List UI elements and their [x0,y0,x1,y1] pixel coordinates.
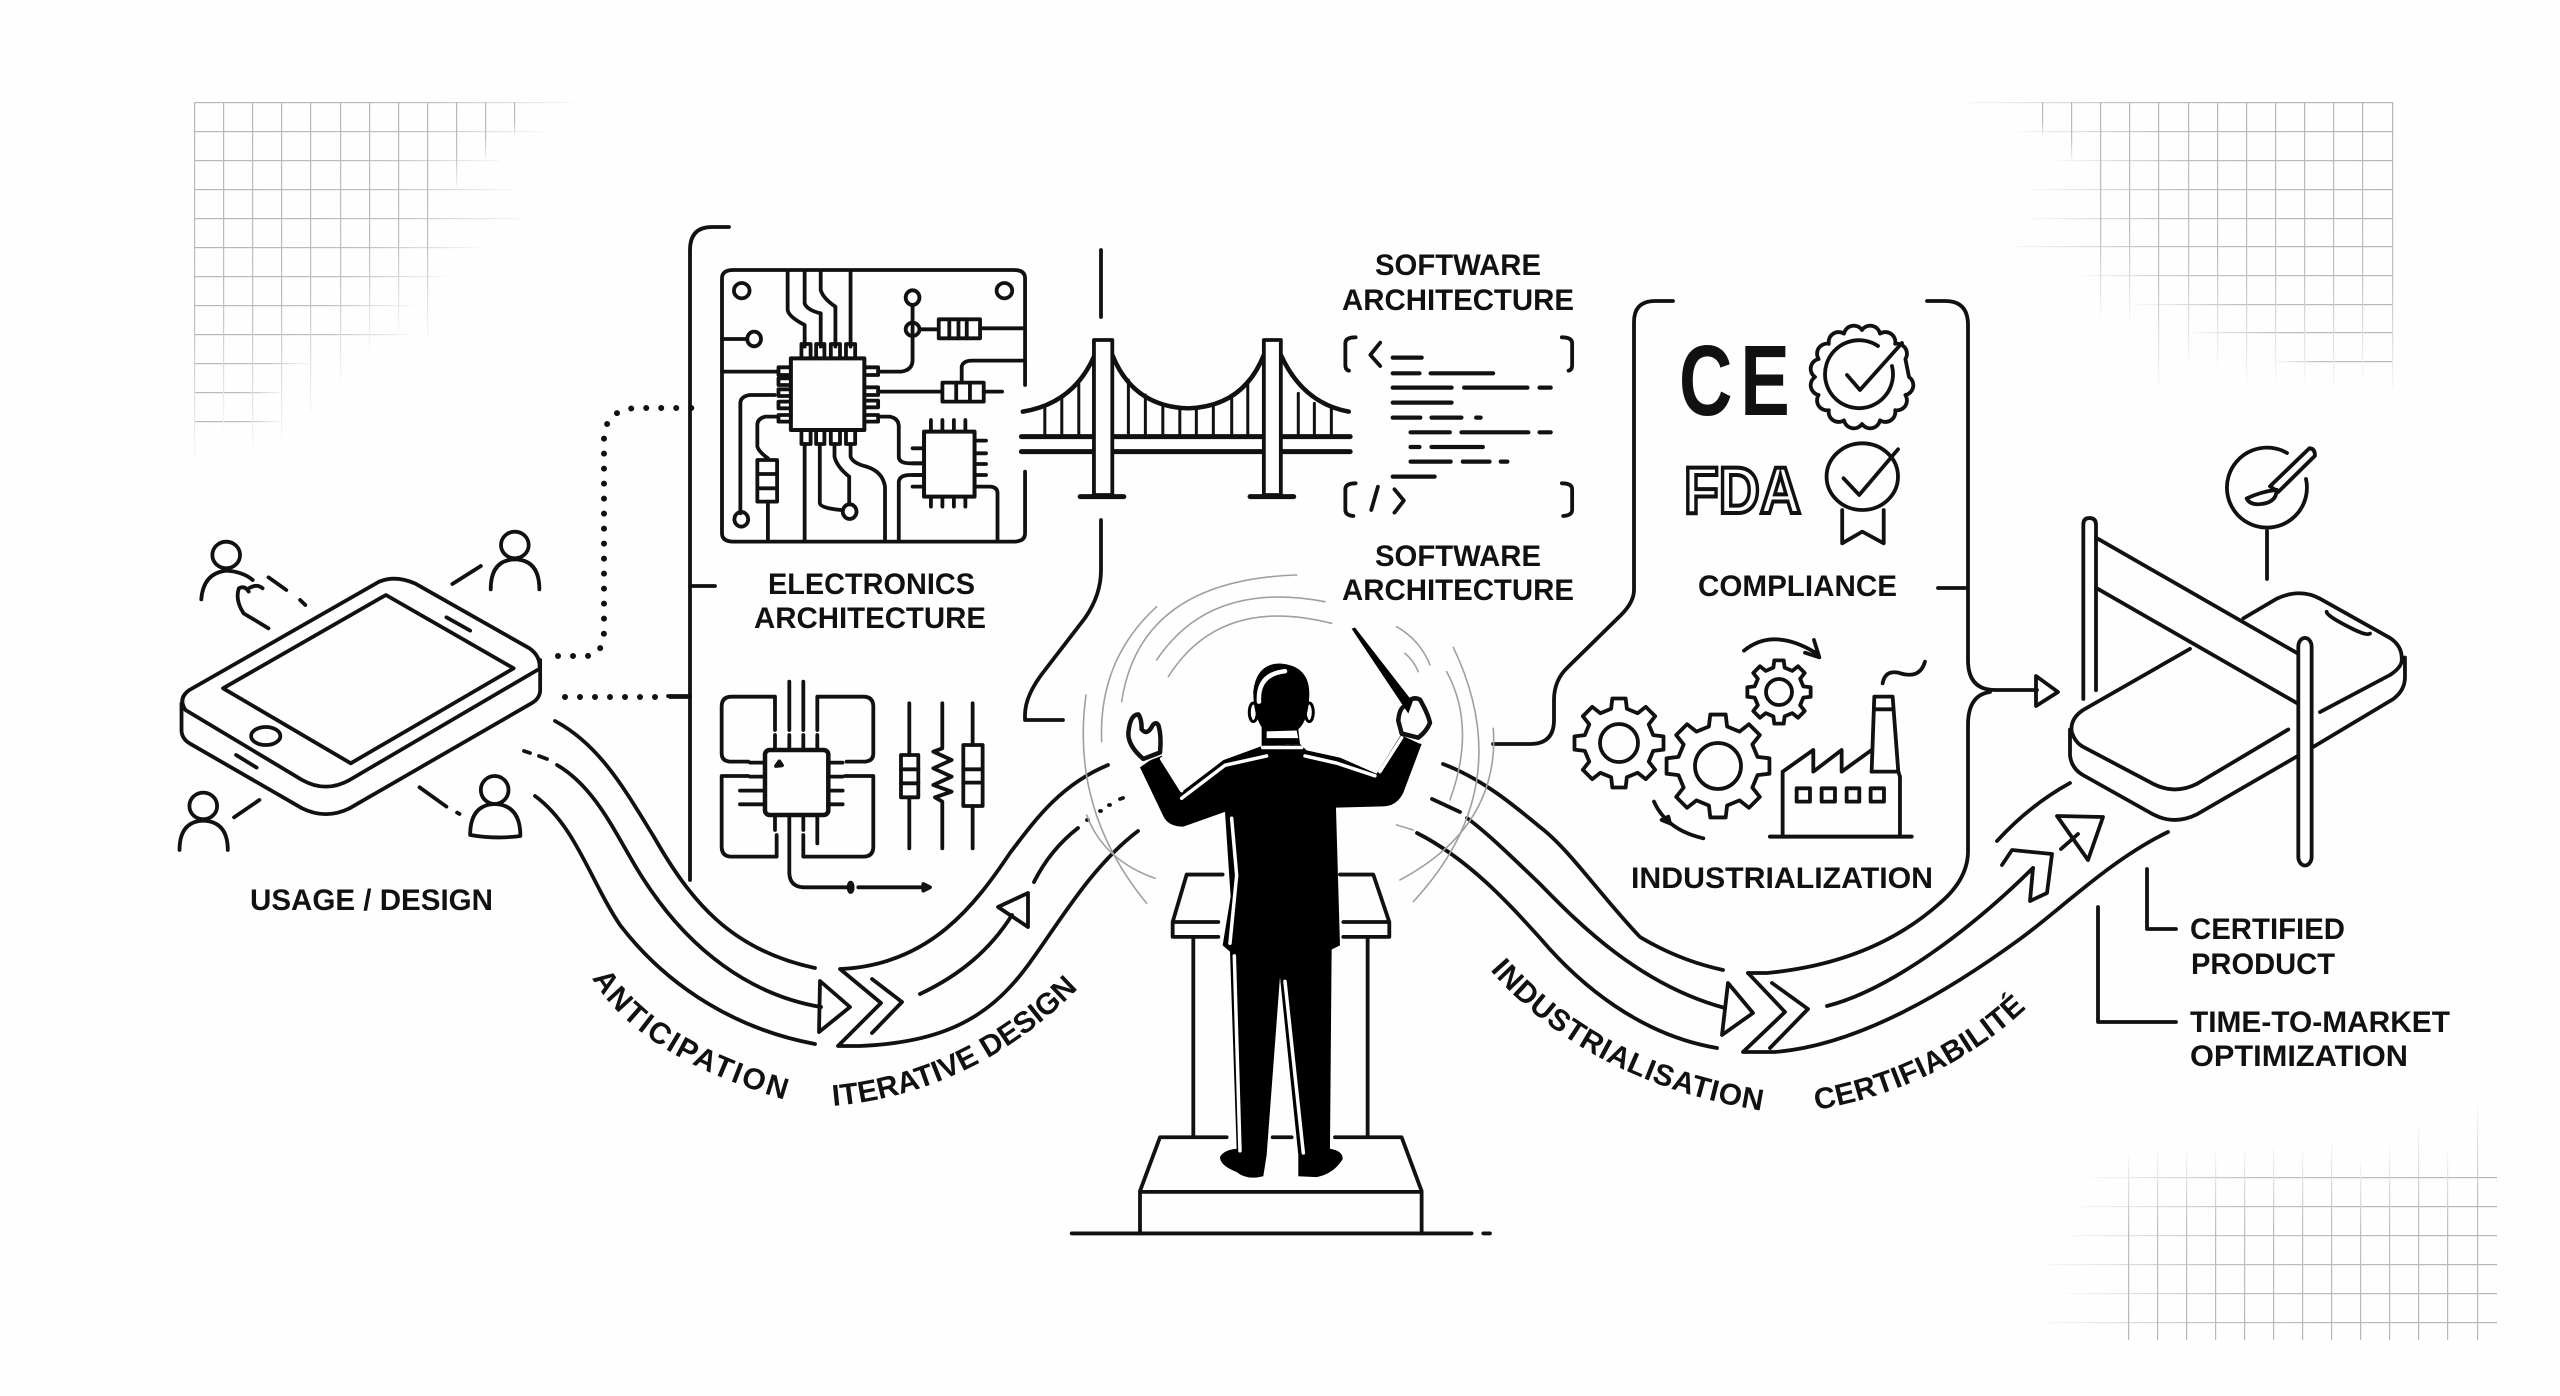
arrow: certifiability flow [1743,783,2168,1052]
icon: FDA logo: FDA [1684,453,1801,527]
label: iterative design: ITERATIVE DESIGN [832,975,1077,1106]
label: software architecture top: ARCHITECTURE [1342,284,1574,317]
panel: software architecture [1342,249,1574,607]
arrow: anticipation flow [524,721,850,1044]
label: software architecture bottom: SOFTWARE [1375,540,1541,573]
panel: usage / design [180,532,540,917]
icon: user bottom right [420,776,520,837]
icon: electronics circuit board [722,270,1025,542]
icon: factory [1770,662,1925,837]
label: industrialization: INDUSTRIALIZATION [1631,862,1933,895]
icon: rotation arrows [1654,639,1819,838]
label: anticipation: ANTICIPATION [592,973,789,1100]
arrow: to certified product [2036,676,2058,706]
label: usage / design: USAGE / DESIGN [250,884,493,917]
icon: brush badge [2227,448,2315,579]
label: electronics architecture: ARCHITECTURE [754,602,986,635]
dotted connectors from phone to architecture [558,408,695,697]
background grid: bottom right [2047,1106,2497,1340]
figure: conductor on podium [1072,628,1490,1233]
label: software architecture top [1342,249,1574,317]
icon: user touching the phone [201,542,305,628]
icon: gears and factory [1574,639,1925,838]
background grid: top right [1968,102,2393,390]
icon: middle gear [1667,715,1769,817]
callout: certified product: CERTIFIED [2190,913,2345,946]
icon: certification seal [1811,326,1913,428]
label: electronics architecture: ELECTRONICS [768,568,975,601]
label: software architecture top: SOFTWARE [1375,249,1541,282]
label: electronics architecture [754,568,986,635]
callout: time-to-market optimization [2098,907,2450,1073]
arrow: iterative design flow [838,765,1138,1046]
icon: second chip with resistors [722,682,983,892]
label: software architecture bottom [1342,540,1574,607]
panel: architecture bracket [668,227,1101,880]
background grid: top left [194,102,573,460]
arrow: industrialisation flow [1417,764,1753,1048]
panel: compliance and industrialization bracket [1493,301,2058,973]
icon: suspension bridge [1021,340,1350,497]
callout: certified product [2147,869,2345,981]
icon: user bottom left [180,793,259,850]
icon: conductor silhouette [1140,664,1422,1178]
icon: tilted smartphone [182,579,540,814]
panel: certified product [2070,448,2450,1073]
label: certifiabilité: CERTIFIABILITÉ [1815,992,2026,1108]
icon: sound halo arcs [1083,575,1494,903]
icon: podium and platform [1072,875,1490,1233]
callout: time-to-market optimization: OPTIMIZATION [2190,1040,2408,1073]
icon: code block [1345,337,1572,516]
icon: small gear [1747,660,1811,724]
icon: finished phone with finish banner [2070,518,2405,865]
icon: left gear [1574,698,1664,788]
icon: left hand [1128,714,1161,759]
label: software architecture bottom: ARCHITECTURE [1342,574,1574,607]
icon: user top right [452,532,539,589]
icon: baton [1352,628,1413,714]
label: compliance: COMPLIANCE [1698,570,1897,603]
icon: CE mark: CE [1679,324,1790,437]
icon: right hand [1398,698,1430,738]
label: industrialisation: INDUSTRIALISATION [1491,958,1764,1110]
callout: time-to-market optimization: TIME-TO-MARKET [2190,1006,2450,1039]
icon: medal with ribbon [1827,443,1898,543]
callout: certified product: PRODUCT [2191,948,2335,981]
